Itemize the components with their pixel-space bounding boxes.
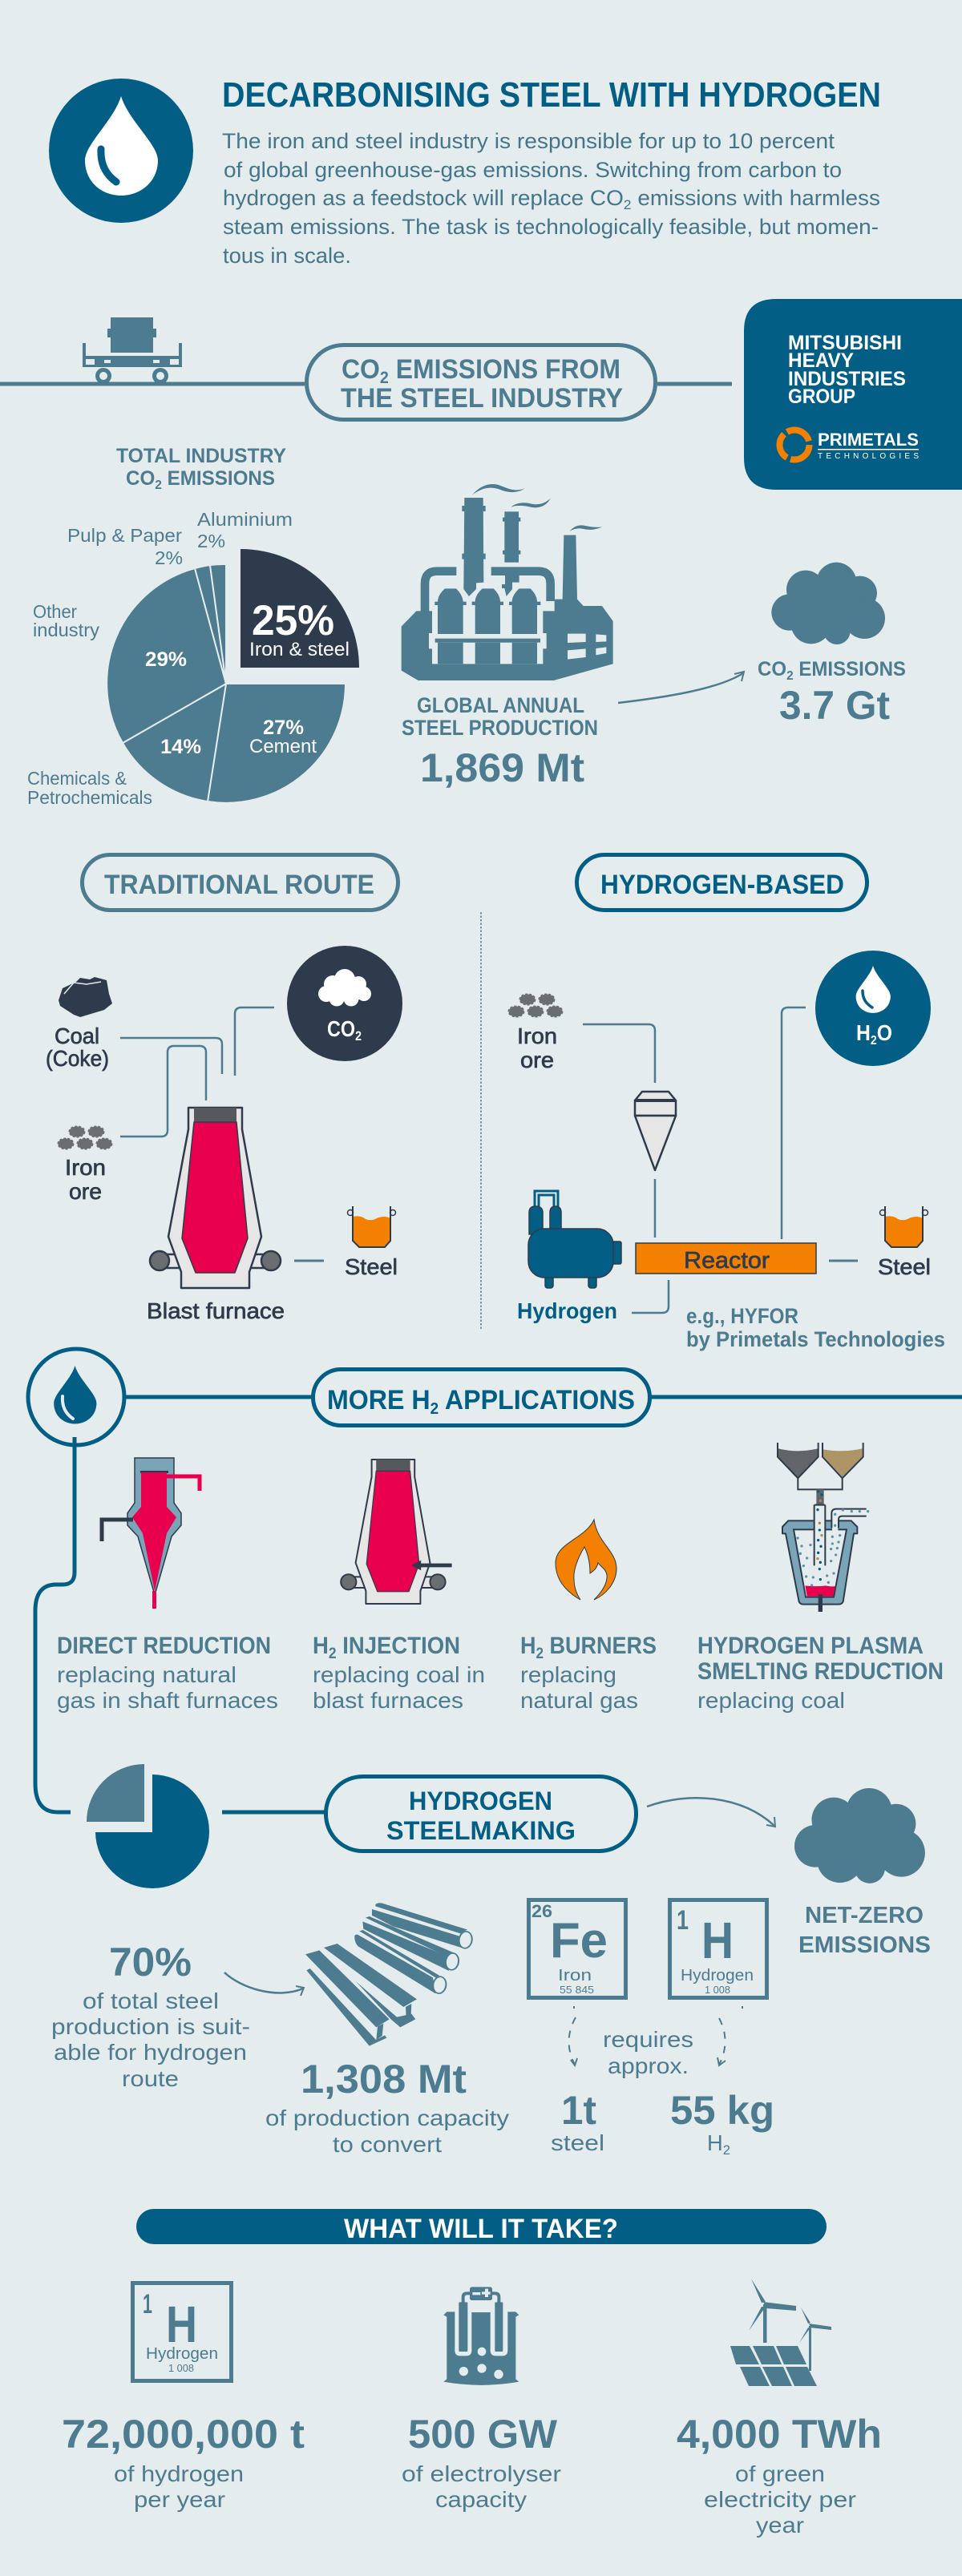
text: global annual steel production: 1,869 Mt bbox=[420, 745, 584, 790]
text: CO2 emissions 3.7 Gt: 3.7 Gt bbox=[779, 683, 890, 728]
text: CO2 emissions 3.7 Gt: CO bbox=[758, 658, 787, 680]
icon: steel factory bbox=[402, 484, 613, 680]
icon: CO2 circle: CO bbox=[327, 1016, 361, 1041]
icon: drop in outlined circle bbox=[28, 1349, 124, 1445]
callout: HYFOR: e.g., HYFOR bbox=[686, 1304, 798, 1328]
icon: H2O circle bbox=[815, 951, 931, 1066]
icon: net-zero cloud bbox=[794, 1788, 925, 1884]
stat: electrolyser capacity: 500 GW bbox=[408, 2412, 558, 2457]
icon: iron element box bbox=[529, 1900, 625, 1997]
connectors: hydrogen route flow lines bbox=[583, 1007, 858, 1313]
label: iron ore hydrogen route: Iron bbox=[517, 1024, 557, 1048]
heading: CO2 emissions pill: THE STEEL INDUSTRY bbox=[341, 383, 623, 414]
panel: company logos: MITSUBISHI bbox=[788, 332, 902, 354]
icon: hydrogen element box: Hydrogen bbox=[681, 1967, 754, 1984]
text: requires approx: approx. bbox=[608, 2053, 689, 2078]
section lines: more applications bbox=[35, 1397, 962, 1812]
icon: H2 injection furnace bbox=[341, 1460, 452, 1604]
text: hydrogen plasma smelting reduction: HYDROGEN PLASMA bbox=[697, 1633, 924, 1659]
pie chart: industry emissions: 27% bbox=[263, 717, 304, 739]
intro text block bbox=[222, 129, 880, 268]
route divider bbox=[480, 912, 482, 1330]
icon: CO2 circle bbox=[287, 946, 402, 1061]
icon: H2O circle: H bbox=[856, 1020, 872, 1045]
icon: steel ladle hydrogen route bbox=[880, 1206, 928, 1247]
icon: blast furnace bbox=[150, 1108, 281, 1288]
icon: iron element box: Iron bbox=[558, 1967, 592, 1984]
heading: what will it take: WHAT WILL IT TAKE? bbox=[344, 2214, 618, 2244]
reactor: Reactor bbox=[684, 1248, 770, 1274]
stat: 55 kg H2: H bbox=[707, 2130, 723, 2155]
pie labels: Aluminium bbox=[197, 509, 293, 530]
text: H2 injection bbox=[313, 1633, 485, 1713]
icon: hydrogen element box large: 1 bbox=[143, 2289, 152, 2320]
icon: flame bbox=[556, 1520, 616, 1600]
icon: hydrogen element box: 1 008 bbox=[705, 1984, 730, 1996]
text: H2 injection: blast furnaces bbox=[313, 1688, 463, 1713]
title: DECARBONISING STEEL WITH HYDROGEN bbox=[222, 75, 881, 115]
text: hydrogen plasma smelting reduction: replacing coal bbox=[697, 1688, 845, 1713]
label: blast furnace: Blast furnace bbox=[147, 1298, 285, 1323]
stat: green electricity: electricity per bbox=[704, 2487, 856, 2512]
text: requires approx bbox=[603, 2027, 693, 2078]
text: H2 burners: 2 bbox=[536, 1645, 544, 1662]
text: H2 burners: replacing bbox=[520, 1662, 616, 1687]
icon: H2O circle: O bbox=[877, 1020, 892, 1045]
icon: rail cart bbox=[83, 317, 182, 384]
stat: electrolyser capacity: of electrolyser bbox=[402, 2461, 561, 2486]
stat: hydrogen per year: per year bbox=[134, 2487, 225, 2512]
icon: hydrogen element box large: 1 008 bbox=[168, 2362, 194, 2374]
icon: hydrogen element box: H bbox=[701, 1912, 734, 1969]
stat: 1t steel bbox=[551, 2088, 604, 2155]
connectors: traditional route flow lines bbox=[120, 1007, 324, 1261]
text: direct reduction: gas in shaft furnaces bbox=[57, 1688, 278, 1713]
text: 70 percent suitable: 70% bbox=[109, 1940, 192, 1984]
icon: steel rods and beams bbox=[305, 1903, 474, 2046]
intro text block: 2 bbox=[624, 197, 632, 212]
icon: plasma smelting reactor bbox=[778, 1443, 869, 1612]
heading: hydrogen-based pill bbox=[577, 854, 867, 910]
pie chart: industry emissions: Cement bbox=[249, 736, 317, 757]
pie labels: Chemicals & bbox=[27, 768, 127, 789]
text: H2 burners bbox=[520, 1633, 657, 1713]
label: iron ore: ore bbox=[69, 1179, 102, 1204]
pie labels: Petrochemicals bbox=[27, 787, 152, 808]
icon: wind turbines and solar panels bbox=[730, 2279, 831, 2386]
label: iron ore hydrogen route bbox=[517, 1024, 557, 1072]
panel: company logos: INDUSTRIES bbox=[788, 368, 906, 390]
label: iron ore hydrogen route: ore bbox=[520, 1048, 554, 1072]
heading: CO2 emissions pill: 2 bbox=[380, 369, 389, 387]
text: 70 percent suitable: production is suit- bbox=[51, 2014, 250, 2039]
label: coal: Coal bbox=[55, 1024, 99, 1048]
pie labels: Pulp & Paper bbox=[67, 525, 182, 546]
label: iron ore bbox=[65, 1155, 106, 1204]
stat: hydrogen per year: 72,000,000 t bbox=[62, 2412, 305, 2457]
icon: shaft hopper bbox=[635, 1092, 676, 1170]
icon: hydrogen element box: 1 bbox=[677, 1905, 689, 1936]
icon: electrolyser bbox=[443, 2287, 519, 2385]
stat: green electricity: of green bbox=[735, 2461, 825, 2486]
chart heading: total industry: 2 bbox=[155, 478, 162, 492]
text: H2 injection: 2 bbox=[329, 1645, 337, 1662]
label: hydrogen: Hydrogen bbox=[517, 1298, 617, 1323]
text: H2 burners: natural gas bbox=[520, 1688, 638, 1713]
icon: iron ore bbox=[58, 1127, 112, 1149]
chart heading: total industry: CO bbox=[126, 467, 156, 490]
text: net-zero emissions: NET-ZERO bbox=[805, 1903, 924, 1928]
label: iron ore: Iron bbox=[65, 1155, 106, 1180]
intro text block: steam emissions. The task is technologically feasible, but momen- bbox=[223, 215, 879, 239]
stat: electrolyser capacity: capacity bbox=[435, 2487, 527, 2512]
icon: coal bbox=[59, 977, 112, 1017]
text: direct reduction bbox=[57, 1633, 278, 1713]
stat: green electricity: 4,000 TWh bbox=[677, 2412, 882, 2457]
pie chart: industry emissions: 14% bbox=[160, 736, 201, 758]
callout: HYFOR: by Primetals Technologies bbox=[686, 1327, 945, 1351]
text: H2 injection: INJECTION bbox=[337, 1633, 460, 1659]
stat: green electricity: year bbox=[756, 2513, 804, 2538]
text: production capacity bbox=[265, 2057, 509, 2157]
text: requires approx: requires bbox=[603, 2027, 693, 2052]
text: global annual steel production: STEEL PRODUCTION bbox=[402, 716, 598, 740]
stat: electrolyser capacity bbox=[402, 2412, 561, 2512]
panel: company logos: HEAVY bbox=[788, 349, 854, 372]
text: 70 percent suitable: of total steel bbox=[83, 1989, 219, 2013]
pie chart: industry emissions: Iron & steel bbox=[249, 639, 350, 660]
panel: company logos bbox=[744, 299, 962, 490]
icon: steel ladle bbox=[348, 1206, 396, 1247]
section rail line bbox=[0, 382, 732, 386]
chart heading: total industry: TOTAL INDUSTRY bbox=[116, 445, 286, 467]
pie labels bbox=[27, 509, 293, 808]
chart heading: total industry bbox=[116, 445, 286, 492]
text: 70 percent suitable: able for hydrogen bbox=[54, 2040, 247, 2065]
text: H2 burners: BURNERS bbox=[544, 1633, 657, 1659]
icon: iron element box: 26 bbox=[532, 1901, 552, 1921]
heading: traditional route pill: TRADITIONAL ROUTE bbox=[104, 870, 374, 900]
text: CO2 emissions 3.7 Gt: EMISSIONS bbox=[794, 658, 906, 680]
text: global annual steel production bbox=[402, 693, 598, 790]
heading: more H2 applications pill: MORE H bbox=[327, 1385, 436, 1415]
text: global annual steel production: GLOBAL ANNUAL bbox=[417, 693, 584, 717]
text: net-zero emissions bbox=[798, 1903, 931, 1958]
label: steel: Steel bbox=[345, 1254, 398, 1279]
heading: more H2 applications pill: 2 bbox=[430, 1400, 439, 1418]
arrow: steelmaking to net-zero bbox=[647, 1798, 775, 1827]
stat: 55 kg H2: 55 kg bbox=[670, 2088, 774, 2133]
heading: more H2 applications pill: APPLICATIONS bbox=[439, 1385, 635, 1415]
text: production capacity: 1,308 Mt bbox=[301, 2057, 467, 2102]
intro text block: The iron and steel industry is responsible for up to 10 percent bbox=[222, 129, 835, 153]
icon: CO2 circle: 2 bbox=[355, 1028, 362, 1044]
text: 70 percent suitable: route bbox=[122, 2066, 179, 2091]
text: hydrogen plasma smelting reduction: SMELTING REDUCTION bbox=[697, 1658, 944, 1685]
icon: iron element box: Fe bbox=[550, 1913, 608, 1968]
heading: hydrogen steelmaking pill bbox=[325, 1776, 637, 1851]
text: H2 injection: H bbox=[313, 1633, 330, 1659]
heading: hydrogen-based pill: HYDROGEN-BASED bbox=[600, 870, 844, 900]
text: H2 burners: H bbox=[520, 1633, 538, 1659]
pie chart: industry emissions bbox=[107, 549, 359, 803]
pie chart: industry emissions: 29% bbox=[145, 648, 187, 671]
heading: what will it take bbox=[136, 2209, 827, 2244]
icon: hydrogen drop in circle bbox=[49, 79, 193, 223]
heading: traditional route pill bbox=[82, 854, 398, 910]
stat: hydrogen per year: of hydrogen bbox=[114, 2461, 244, 2486]
heading: hydrogen steelmaking pill: HYDROGEN bbox=[409, 1787, 552, 1815]
label: steel hydrogen route: Steel bbox=[878, 1254, 931, 1279]
stat: hydrogen per year bbox=[62, 2412, 305, 2512]
stat: green electricity bbox=[677, 2412, 882, 2538]
panel: company logos: PRIMETALS bbox=[818, 430, 919, 450]
icon: CO2 cloud bbox=[771, 563, 885, 644]
icon: iron element box: 55 845 bbox=[560, 1984, 594, 1996]
text: hydrogen plasma smelting reduction bbox=[697, 1633, 944, 1713]
pie labels: 2% bbox=[197, 531, 225, 551]
panel: company logos: GROUP bbox=[788, 386, 855, 408]
chart heading: total industry: EMISSIONS bbox=[162, 467, 275, 490]
text: CO2 emissions 3.7 Gt bbox=[758, 658, 906, 728]
icon: hydrogen element box large bbox=[133, 2283, 231, 2380]
text: direct reduction: DIRECT REDUCTION bbox=[57, 1633, 271, 1659]
icon: hydrogen element box large: Hydrogen bbox=[146, 2345, 218, 2363]
stat: 1t steel: steel bbox=[551, 2130, 604, 2155]
reactor bbox=[636, 1243, 816, 1274]
icon: hydrogen tank bbox=[528, 1191, 621, 1288]
heading: CO2 emissions pill: EMISSIONS FROM bbox=[389, 354, 620, 385]
text: H2 injection: replacing coal in bbox=[313, 1662, 485, 1687]
heading: CO2 emissions pill bbox=[306, 345, 656, 420]
icon: hydrogen element box large: H bbox=[166, 2295, 197, 2353]
pie labels: industry bbox=[33, 620, 100, 640]
text: CO2 emissions 3.7 Gt: 2 bbox=[786, 669, 794, 683]
stat: 55 kg H2: 2 bbox=[723, 2142, 730, 2158]
arrows: dashed curves to requirements bbox=[569, 2006, 742, 2065]
text: production capacity: to convert bbox=[333, 2132, 442, 2157]
label: coal: (Coke) bbox=[46, 1046, 109, 1071]
arrow: 70 percent to steel bars bbox=[224, 1972, 304, 1996]
icon: hydrogen element box bbox=[670, 1900, 766, 1997]
icon: iron ore hydrogen route bbox=[508, 994, 563, 1016]
panel: company logos: TECHNOLOGIES bbox=[818, 452, 919, 461]
stat: 55 kg H2 bbox=[670, 2088, 774, 2158]
heading: CO2 emissions pill: CO bbox=[342, 354, 382, 385]
stat: 1t steel: 1t bbox=[561, 2088, 596, 2133]
text: direct reduction: replacing natural bbox=[57, 1662, 236, 1687]
heading: hydrogen steelmaking pill: STEELMAKING bbox=[386, 1816, 576, 1845]
pie chart: 70 percent share bbox=[87, 1764, 209, 1888]
label: coal bbox=[46, 1024, 109, 1071]
icon: direct reduction shaft furnace bbox=[102, 1458, 200, 1609]
intro text block: hydrogen as a feedstock will replace CO bbox=[223, 186, 610, 210]
callout: HYFOR bbox=[686, 1304, 945, 1351]
icon: H2O circle: 2 bbox=[871, 1034, 877, 1048]
intro text block: of global greenhouse-gas emissions. Switching from carbon to bbox=[224, 158, 842, 182]
pie chart: industry emissions: 25% bbox=[252, 597, 334, 644]
intro text block: tous in scale. bbox=[223, 244, 351, 268]
intro text block: emissions with harmless bbox=[632, 186, 880, 210]
text: 70 percent suitable bbox=[51, 1940, 250, 2091]
pie labels: Other bbox=[33, 601, 77, 622]
heading: more H2 applications pill bbox=[313, 1369, 649, 1425]
pie labels: 2% bbox=[155, 547, 183, 568]
text: net-zero emissions: EMISSIONS bbox=[798, 1932, 931, 1958]
arrow: production to emissions bbox=[618, 672, 744, 703]
text: production capacity: of production capacity bbox=[265, 2106, 509, 2130]
